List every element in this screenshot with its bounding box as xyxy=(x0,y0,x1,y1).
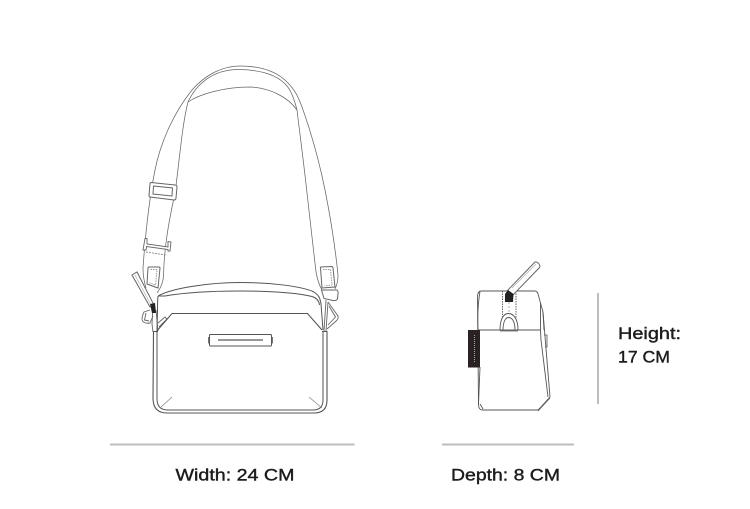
D-ring xyxy=(500,314,518,331)
height label: Height: xyxy=(618,324,681,343)
right strap tab xyxy=(320,266,338,301)
height label: 17 CM xyxy=(618,348,670,366)
side view of bag xyxy=(468,262,550,411)
side zipper pull xyxy=(505,262,540,302)
front view of bag with strap xyxy=(132,66,338,413)
depth label: Depth: 8 CM xyxy=(451,466,560,484)
shoulder strap xyxy=(143,66,338,293)
side body xyxy=(478,291,550,411)
bag body xyxy=(153,282,327,413)
zipper pull xyxy=(132,272,156,313)
depth measure line xyxy=(442,444,574,446)
width measure line xyxy=(110,444,354,446)
black side label xyxy=(468,330,480,368)
width label: Width: 24 CM xyxy=(176,466,294,484)
strap buckle xyxy=(149,182,177,200)
height label xyxy=(618,324,681,366)
strap slider xyxy=(143,238,171,255)
left strap tab xyxy=(147,267,160,288)
right clip hardware xyxy=(324,300,338,331)
side zipper strip xyxy=(502,291,516,327)
height measure line xyxy=(597,293,599,404)
logo patch xyxy=(208,334,272,346)
left clip hardware xyxy=(142,305,167,332)
